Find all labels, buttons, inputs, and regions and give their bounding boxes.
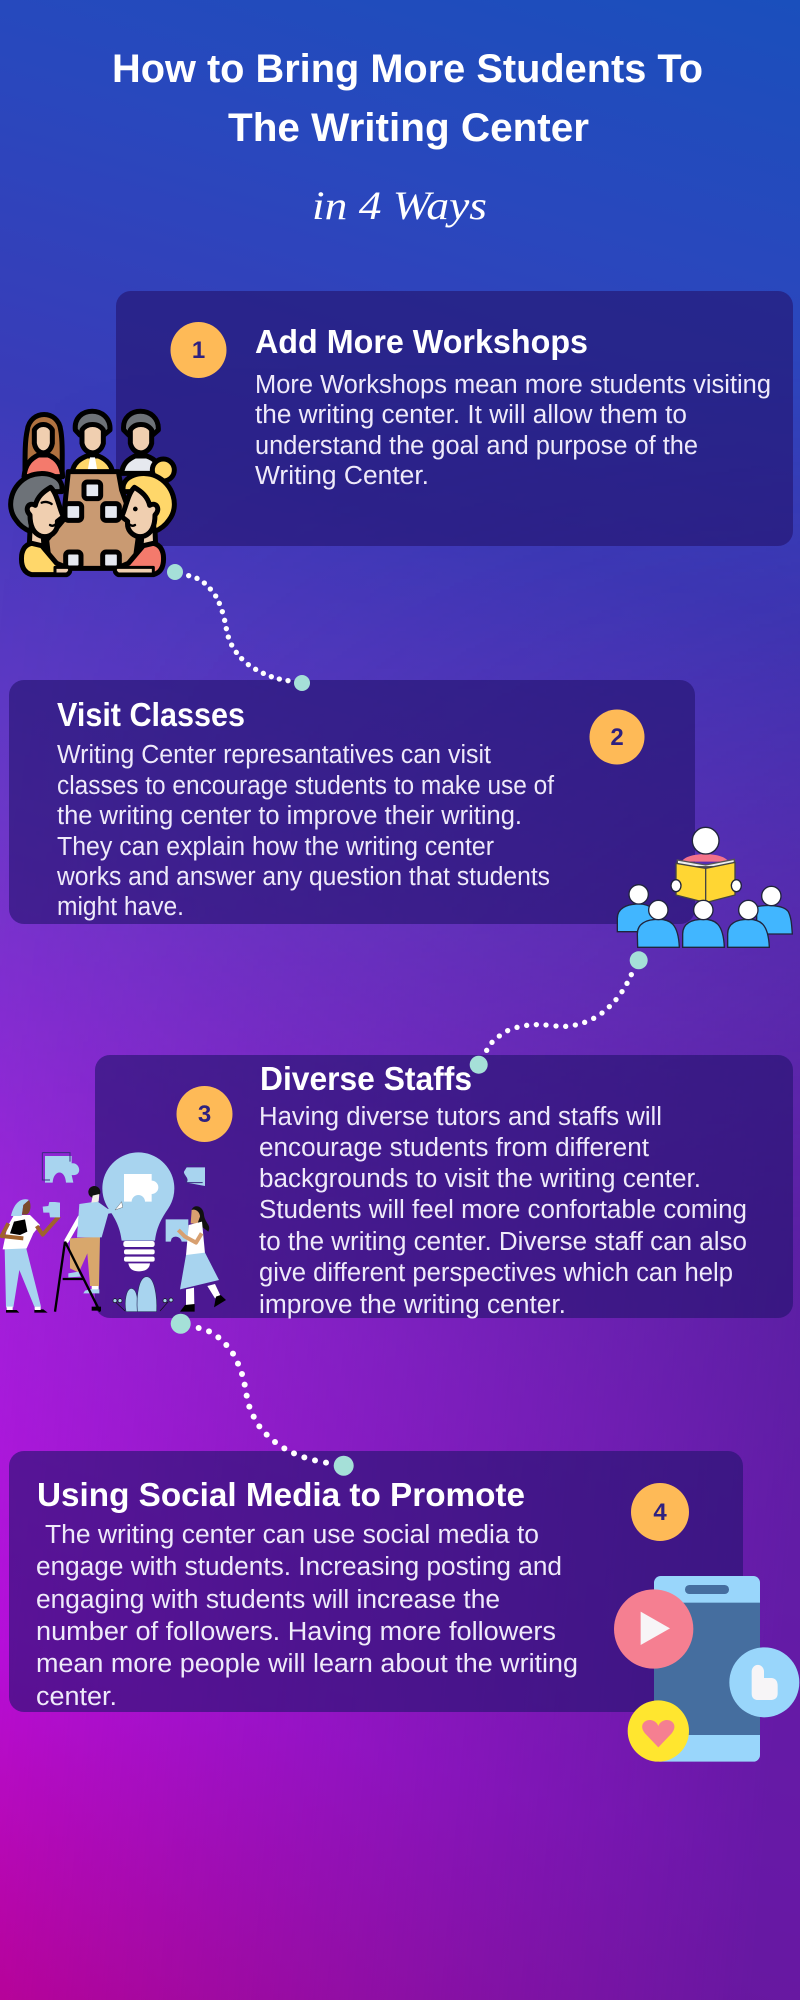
connector: visit classes to diverse staffs	[484, 972, 634, 1053]
heading: using social media: Using Social Media to Promote	[37, 1476, 525, 1513]
panel: diverse staffs	[95, 1055, 793, 1319]
icon: team building a light bulb puzzle	[2, 1152, 226, 1313]
number badge 3: 3	[198, 1101, 211, 1128]
icon: meeting around a table	[11, 411, 174, 575]
title: The Writing Center	[228, 106, 589, 150]
title	[112, 47, 703, 150]
icon: phone with social media buttons	[614, 1576, 799, 1762]
text block: diverse staffs	[259, 1103, 747, 1319]
text block: workshops: More Workshops mean more students visiting	[255, 371, 771, 399]
panel: add more workshops	[116, 291, 793, 546]
heading: add more workshops: Add More Workshops	[255, 323, 588, 360]
text block: social media: engage with students. Increasing posting and	[36, 1553, 562, 1581]
text block: social media: The writing center can use social media to	[45, 1521, 539, 1549]
text block: visit classes: They can explain how the writing center	[57, 833, 494, 861]
text block: visit classes: classes to encourage students to make use of	[57, 772, 555, 800]
connector: workshops to visit classes	[186, 573, 291, 683]
text block: social media: mean more people will learn about the writing	[36, 1650, 578, 1678]
panel: visit classes	[9, 680, 695, 924]
text block: visit classes	[56, 741, 555, 921]
subtitle: in 4 Ways	[312, 183, 487, 228]
text block: social media: engaging with students will increase the	[36, 1586, 500, 1614]
text block: social media: number of followers. Having more followers	[36, 1618, 556, 1646]
text block: visit classes: might have.	[57, 893, 184, 921]
text block: diverse staffs: give different perspectives which can help	[259, 1259, 733, 1287]
number badge 1	[170, 322, 226, 378]
big dots: connector 3 ends	[171, 1314, 354, 1476]
title: How to Bring More Students To	[112, 47, 703, 91]
number badge 3	[176, 1086, 232, 1142]
text block: visit classes: the writing center to improve their writing.	[57, 802, 522, 830]
number badge 4: 4	[653, 1499, 667, 1526]
text block: diverse staffs: Students will feel more confortable coming	[259, 1196, 747, 1224]
text block: visit classes: Writing Center represantatives can visit	[57, 741, 491, 769]
text block: diverse staffs: to the writing center. Diverse staff can also	[259, 1228, 747, 1256]
number badge 2: 2	[610, 724, 624, 751]
number badge 2	[590, 710, 644, 764]
text block: workshops: understand the goal and purpose of the	[255, 432, 698, 460]
big dots: connector 2 ends	[470, 951, 648, 1074]
text block: diverse staffs: improve the writing center.	[259, 1291, 566, 1319]
text block: diverse staffs: Having diverse tutors and staffs will	[259, 1103, 662, 1131]
text block: diverse staffs: backgrounds to visit the writing center.	[259, 1165, 701, 1193]
text block: visit classes: works and answer any question that students	[56, 863, 550, 891]
text block: workshops: Writing Center.	[255, 462, 429, 490]
icon: teacher reading to students	[617, 827, 792, 947]
panel: using social media	[9, 1451, 743, 1712]
heading: visit classes: Visit Classes	[57, 696, 245, 733]
number badge 4	[631, 1483, 689, 1541]
text block: workshops: the writing center. It will allow them to	[255, 401, 687, 429]
number badge 1: 1	[192, 337, 205, 364]
heading: diverse staffs: Diverse Staffs	[260, 1060, 472, 1097]
text block: social media: center.	[36, 1683, 117, 1711]
big dots: connector 1 ends	[167, 564, 310, 691]
text block: social media	[36, 1521, 578, 1711]
text block: diverse staffs: encourage students from different	[259, 1134, 649, 1162]
text block: workshops	[255, 371, 771, 490]
connector: diverse staffs to social media	[196, 1325, 329, 1466]
